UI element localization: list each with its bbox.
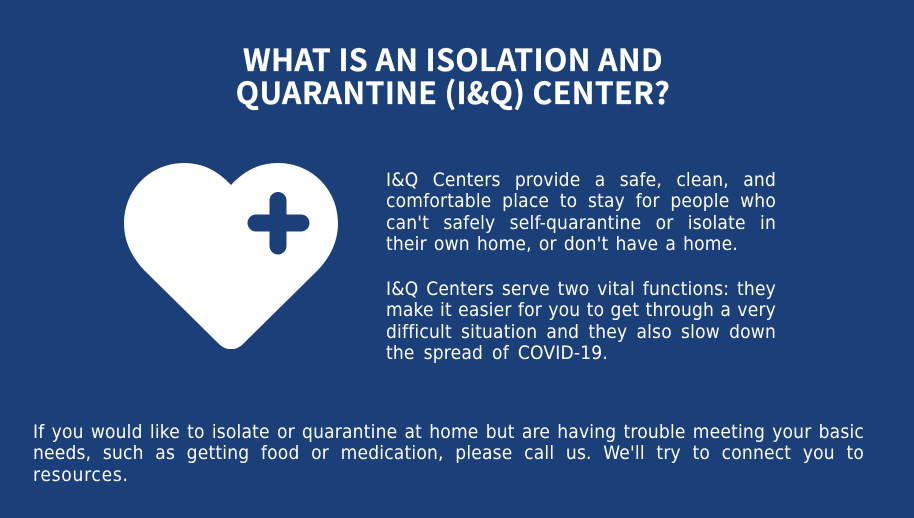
text block: what centers provide: I&Q Centers provide a safe, clean, and bbox=[386, 169, 776, 191]
text block: two vital functions: make it easier for you to get through a very bbox=[386, 299, 776, 321]
text block: what centers provide: comfortable place to stay for people who bbox=[386, 190, 776, 212]
icon: heart with plus bbox=[124, 163, 338, 349]
text block: call for resources: If you would like to isolate or quarantine at home but are having trouble meeting your basic bbox=[33, 421, 864, 443]
text block: two vital functions bbox=[386, 278, 776, 364]
text block: call for resources bbox=[33, 421, 864, 486]
title: WHAT IS AN ISOLATION AND bbox=[243, 36, 663, 80]
title bbox=[236, 36, 670, 113]
text block: what centers provide: their own home, or don't have a home. bbox=[386, 233, 738, 255]
text block: two vital functions: difficult situation and they also slow down bbox=[386, 321, 776, 343]
text block: call for resources: needs, such as getting food or medication, please call us. We'll try to connect you to bbox=[33, 442, 864, 464]
text block: what centers provide bbox=[386, 169, 776, 255]
text block: call for resources: resources. bbox=[33, 464, 129, 486]
text block: what centers provide: can't safely self-quarantine or isolate in bbox=[386, 212, 776, 234]
title: QUARANTINE (I&Q) CENTER? bbox=[236, 69, 670, 113]
text block: two vital functions: I&Q Centers serve two vital functions: they bbox=[386, 278, 776, 300]
text block: two vital functions: the spread of COVID-19. bbox=[386, 342, 608, 364]
